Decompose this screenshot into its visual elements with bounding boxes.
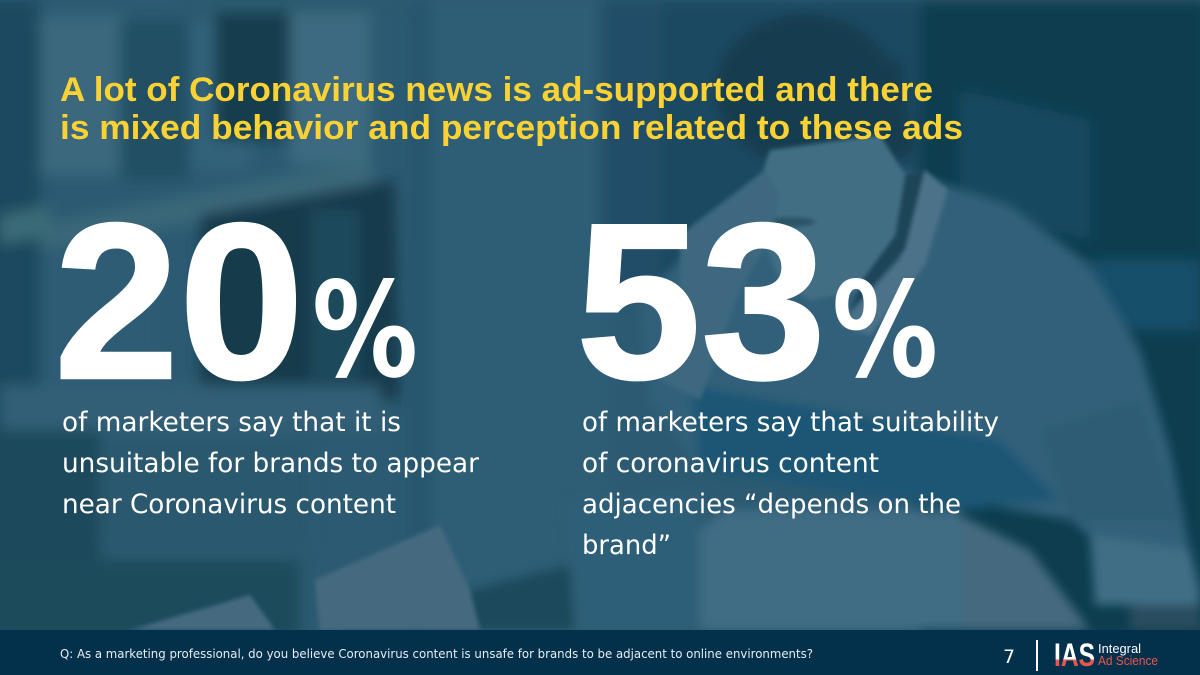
description text: of coronavirus content [582, 448, 879, 479]
big number 20: 20 [54, 178, 304, 426]
statistic: 20 percent [54, 178, 480, 520]
hair [715, 14, 895, 166]
collar [840, 170, 948, 335]
chairs [315, 525, 480, 630]
big number 53: 53 [576, 178, 826, 426]
survey question: Q: As a marketing professional, do you believe Coronavirus content is unsafe for brands to be adjacent to online environments? [60, 646, 813, 661]
description text: near Coronavirus content [62, 489, 396, 520]
sweater [640, 170, 1192, 570]
logo: Integral Ad Science: Ad Science [1098, 654, 1158, 668]
description text: of marketers say that it is [62, 407, 401, 438]
description text: unsuitable for brands to appear [62, 448, 480, 479]
logo: Integral Ad Science: Integral [1098, 642, 1141, 656]
percent sign: % [312, 254, 418, 408]
title: is mixed behavior and perception related to these ads [60, 109, 963, 147]
laptop and cuff [700, 510, 960, 630]
logo: Integral Ad Science [1054, 637, 1158, 673]
percent sign: % [832, 254, 938, 408]
statistic: 53 percent [576, 178, 999, 561]
face and neck [750, 135, 905, 300]
description text [62, 407, 480, 520]
footer bar [0, 630, 1200, 675]
logo: Integral Ad Science: IAS [1054, 637, 1095, 673]
chairs and desk [330, 565, 580, 630]
title [60, 71, 963, 147]
title: A lot of Coronavirus news is ad-supported and there [60, 71, 933, 109]
divider [1036, 640, 1038, 671]
description text: of marketers say that suitability [582, 407, 999, 438]
description text: brand” [582, 530, 671, 561]
page number: 7 [1003, 646, 1015, 668]
hand [660, 170, 780, 400]
description text: adjacencies “depends on the [582, 489, 961, 520]
description text [582, 407, 999, 561]
